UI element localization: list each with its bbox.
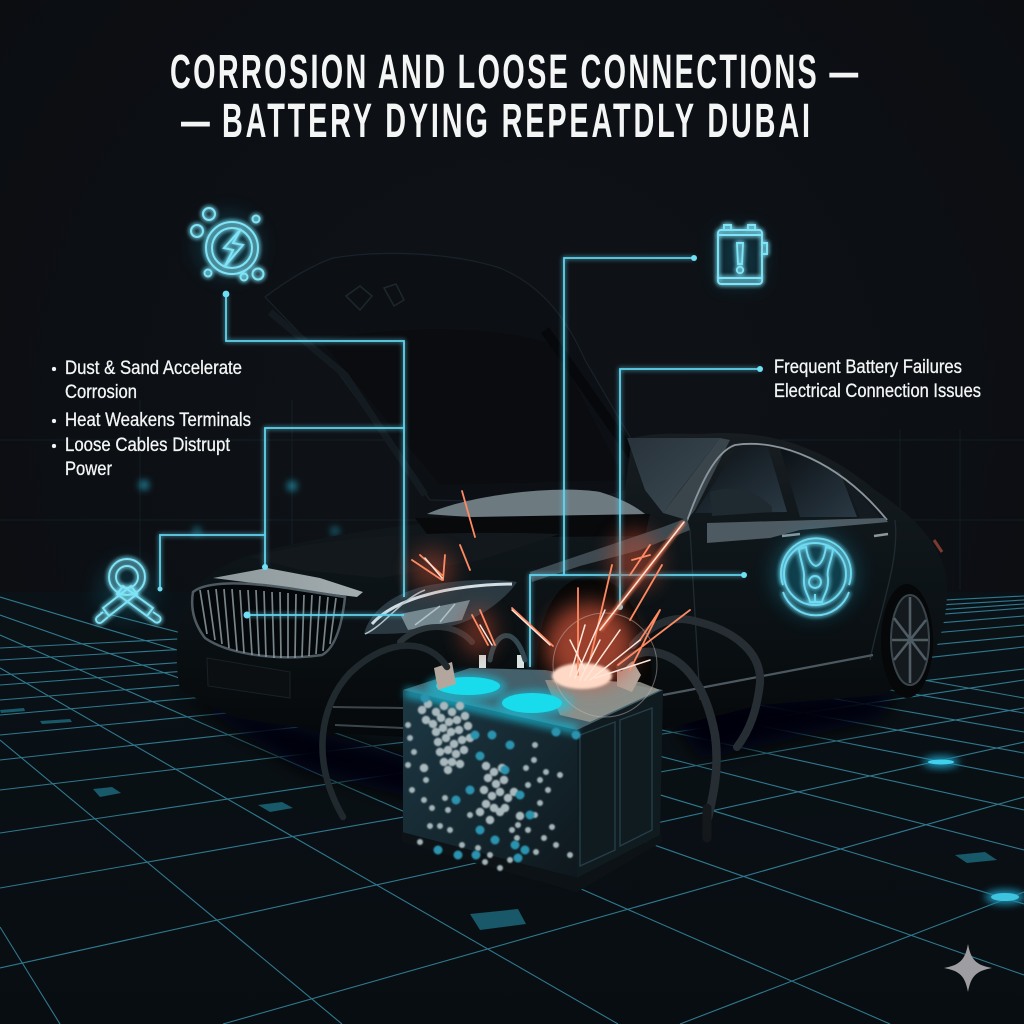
window frame [687, 444, 887, 521]
front window [695, 447, 787, 513]
spark centre [552, 663, 612, 689]
icon: battery clamp [773, 533, 857, 617]
windshield reflection [427, 490, 645, 518]
belt line highlight [707, 518, 888, 543]
door seams [690, 520, 896, 700]
left text block: Power [65, 458, 112, 480]
sill crease [663, 655, 873, 695]
left text block: Heat Weakens Terminals [65, 409, 251, 431]
door handles [782, 534, 888, 536]
icon: sparkle watermark [944, 944, 992, 992]
battery base [402, 832, 662, 892]
left text block: Dust & Sand Accelerate [65, 357, 242, 379]
number plate [207, 658, 290, 698]
battery [402, 655, 663, 892]
connector lines [160, 258, 760, 667]
headlight [364, 580, 517, 634]
icon: battery warning [718, 225, 767, 284]
car body [177, 433, 947, 745]
battery top pale patch [545, 680, 660, 722]
car floor shadow [170, 690, 900, 800]
battery top pools [426, 673, 573, 716]
icon: corrosion lightning [191, 208, 264, 280]
cable: front arcs [322, 636, 717, 838]
floor grid [0, 592, 1024, 1024]
rear quarter window [842, 473, 880, 518]
rear window [780, 448, 857, 517]
car [177, 433, 947, 745]
grille [192, 583, 345, 658]
spark burst ring [553, 613, 657, 717]
battery right side [577, 690, 663, 878]
fender highlight [530, 518, 690, 582]
corrosion blue deposits [425, 698, 576, 858]
hood surface [250, 533, 560, 578]
battery top [403, 668, 663, 730]
rear wheel [881, 584, 933, 698]
wipers [415, 514, 650, 538]
title: — [181, 95, 210, 148]
corrosion small flecks [408, 725, 570, 868]
back terminals [479, 655, 524, 668]
title: CORROSION AND LOOSE CONNECTIONS — [170, 46, 859, 99]
title [170, 46, 859, 148]
corrosion white deposits [422, 704, 520, 820]
back wall grid glows [0, 400, 1024, 590]
battery front side [403, 690, 577, 878]
spark glow [546, 603, 634, 687]
icon: loose cable ribbon [96, 559, 161, 623]
front wheel arch [537, 576, 652, 735]
battery panel lines [580, 708, 652, 866]
battery top glow [405, 692, 577, 730]
spark streaks [412, 491, 690, 675]
cable: back arcs [400, 619, 760, 747]
left text block [52, 357, 251, 480]
windshield [627, 438, 720, 513]
right text block: Frequent Battery Failures [774, 356, 962, 378]
terminals [434, 660, 641, 692]
hood highlight [213, 568, 363, 597]
right text block: Electrical Connection Issues [774, 380, 981, 402]
mirror [710, 489, 772, 516]
sparks [410, 491, 690, 717]
a pillar [663, 438, 730, 520]
connector dots [158, 255, 763, 618]
title: BATTERY DYING REPEATDLY DUBAI [222, 95, 810, 148]
tail light [934, 540, 942, 552]
bumper trim [333, 707, 403, 728]
right text block [774, 356, 981, 402]
open hood [265, 253, 655, 505]
left text block: Loose Cables Distrupt [65, 434, 230, 456]
left text block: Corrosion [65, 381, 137, 403]
